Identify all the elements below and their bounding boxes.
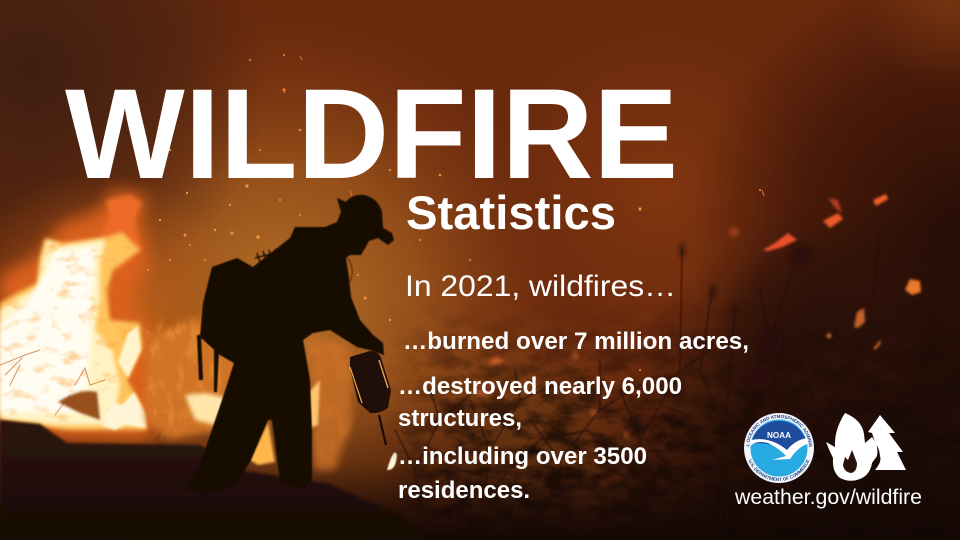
- antenna: [255, 249, 278, 262]
- glowing embers on the right: [763, 194, 921, 350]
- backpack straps: [197, 335, 219, 392]
- title: WILDFIRE: [65, 63, 678, 206]
- soft ember blotches: [474, 227, 739, 439]
- icon: NOAA logo: [744, 413, 814, 483]
- statistic: structures destroyed: …destroyed nearly 6,000: [398, 373, 682, 400]
- website url: weather.gov/wildfire: [734, 486, 922, 509]
- statistic: structures destroyed: [398, 373, 682, 432]
- statistic: residences: residences.: [398, 477, 530, 504]
- icon: fire and tree: [826, 413, 906, 481]
- statistic: residences: …including over 3500: [398, 443, 647, 470]
- subtitle: Statistics: [406, 186, 616, 239]
- icon: NOAA logo: U.S. DEPARTMENT OF COMMERCE: [748, 459, 810, 481]
- hose strap: [348, 258, 352, 283]
- intro text: In 2021, wildfires…: [405, 270, 676, 303]
- ground: [0, 420, 430, 540]
- tree foliage clumps: [679, 242, 812, 387]
- icon: NOAA logo: NOAA: [767, 431, 791, 440]
- drip torch: [350, 351, 391, 445]
- sparks: [147, 54, 764, 371]
- mottled bush texture: [392, 315, 960, 522]
- statistic: acres burned: …burned over 7 million acres,: [403, 328, 749, 355]
- icon: NOAA logo: NATIONAL OCEANIC AND ATMOSPHERIC ADMINISTRATION: [746, 414, 812, 447]
- statistic: residences: [398, 443, 647, 504]
- flames: [0, 190, 397, 475]
- log: [58, 391, 100, 420]
- statistic: structures destroyed: structures,: [398, 405, 522, 432]
- bare bush branches: [395, 230, 950, 530]
- firefighter silhouette: [185, 195, 394, 495]
- burning log and branches in flames: [0, 350, 105, 415]
